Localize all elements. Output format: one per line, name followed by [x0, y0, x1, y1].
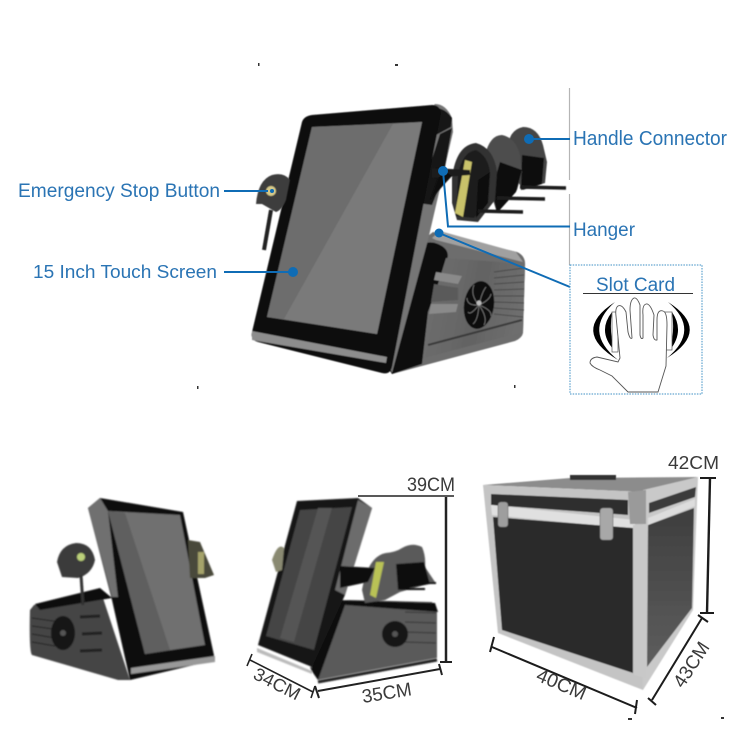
rear screen [88, 498, 215, 680]
side screen [258, 498, 372, 667]
dimension lines: case [490, 478, 716, 714]
device base with fan [384, 231, 525, 374]
bottom middle device view [257, 498, 438, 682]
main device [252, 104, 525, 374]
slot card label: Slot Card [596, 275, 675, 296]
case top [483, 477, 698, 492]
handle [57, 543, 95, 578]
hand icon [590, 298, 690, 392]
touch screen [252, 105, 441, 373]
fan [461, 279, 497, 331]
handle connector rear [508, 127, 547, 190]
label: handle connector: Handle Connector [573, 128, 727, 150]
label: emergency stop button: Emergency Stop Button [18, 180, 220, 202]
handle front [452, 143, 497, 222]
dimension label: 43CM: 43CM [670, 638, 714, 692]
label: touch screen: 15 Inch Touch Screen [33, 261, 217, 282]
handles on right [430, 127, 566, 222]
stray marks [197, 63, 724, 720]
dimension label: 34CM: 34CM [250, 664, 304, 704]
dimension label: 35CM: 35CM [360, 679, 413, 708]
dimension label: 42CM: 42CM [668, 453, 719, 473]
dimension label: 40CM: 40CM [533, 665, 589, 705]
case front [483, 485, 643, 690]
dimension lines: device [247, 496, 454, 698]
callout dots [270, 134, 534, 277]
emergency stop handle [256, 174, 290, 250]
flight case [483, 475, 698, 690]
rear base [30, 589, 130, 680]
latches [498, 502, 508, 527]
label: hanger: Hanger [573, 219, 635, 241]
middle handles [362, 545, 435, 603]
handle middle [485, 135, 522, 213]
callout lines [224, 139, 570, 287]
case side [643, 477, 698, 690]
right bracket of screen [387, 104, 453, 373]
slot card panel [570, 265, 702, 394]
right divider line [568, 88, 570, 265]
dimension label: 39CM: 39CM [407, 475, 455, 496]
bottom left device view [30, 498, 215, 680]
